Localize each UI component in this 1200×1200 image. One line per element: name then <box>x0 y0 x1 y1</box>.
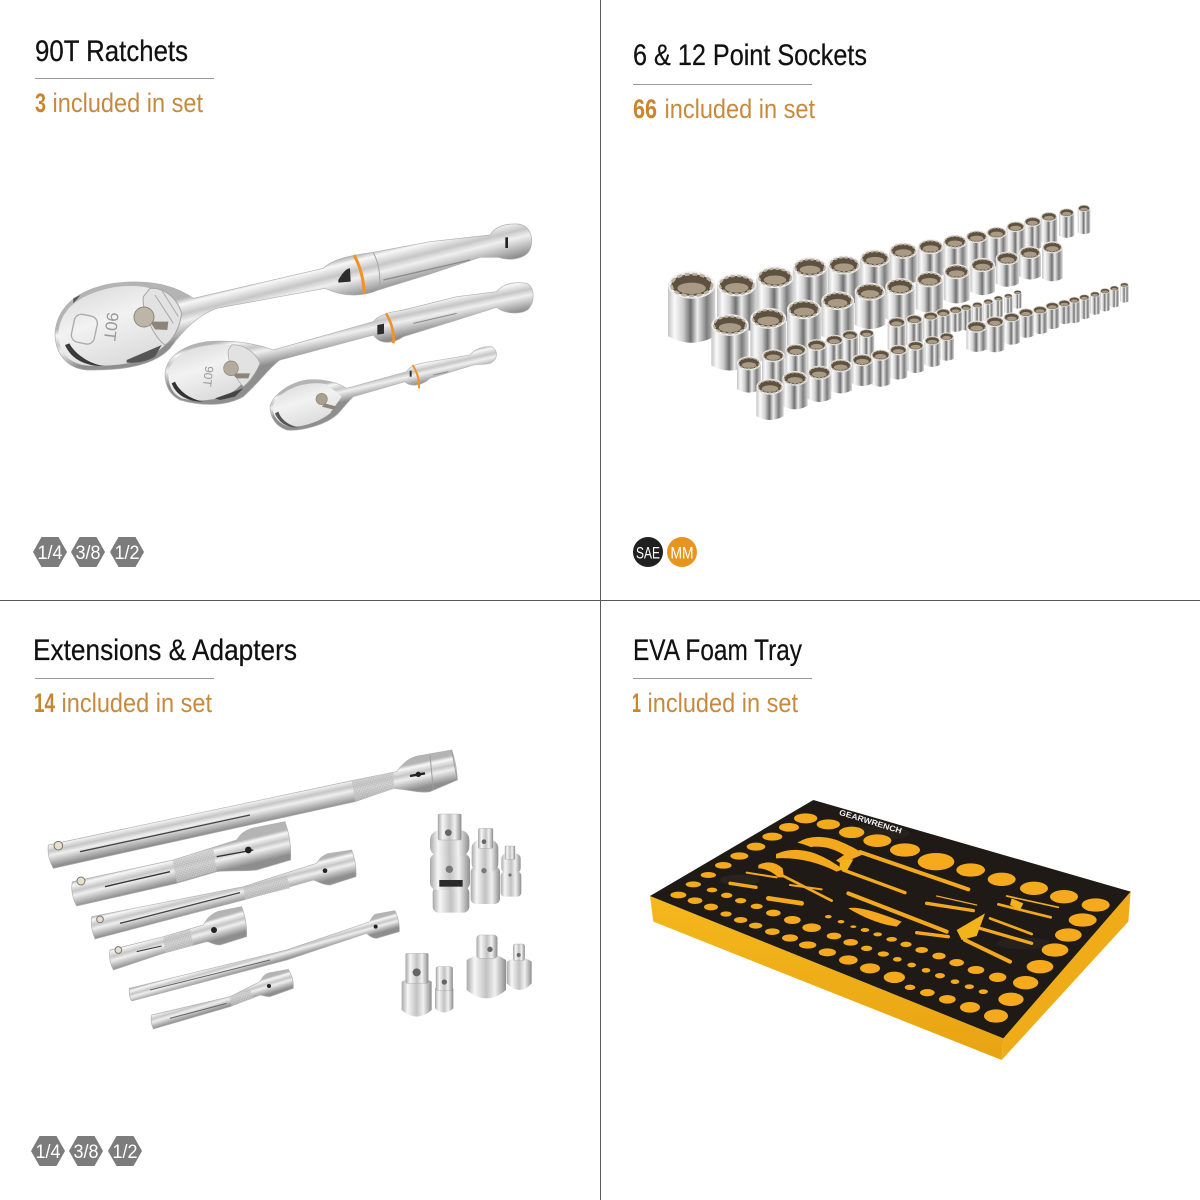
count: 3 included in set: included in set <box>52 88 203 118</box>
socket holes <box>670 813 1110 1023</box>
image: foam tray <box>650 800 1131 1060</box>
ratchet: large <box>55 224 532 370</box>
ratchet: large: 90T <box>100 311 122 342</box>
heading: 90T Ratchets: 90T Ratchets <box>35 35 188 68</box>
badge: 3/8: 3/8 <box>76 543 100 564</box>
ratchet: small <box>270 347 496 430</box>
count: 14 included in set: 14 <box>34 688 55 718</box>
count: 1 included in set: 1 <box>632 688 641 718</box>
drive size badges <box>33 537 144 567</box>
badge: 3/8: 3/8 <box>74 1142 98 1163</box>
panel: 90T ratchets <box>33 35 533 567</box>
image: three chrome ratchets <box>55 224 533 430</box>
image: chrome sockets <box>668 205 1129 420</box>
heading: EVA Foam Tray: EVA Foam Tray <box>633 634 802 667</box>
socket adapters <box>402 935 532 1017</box>
badge: 1/2: 1/2 <box>112 1142 138 1163</box>
count: 1 included in set: included in set <box>648 688 798 718</box>
ratchet: medium <box>165 283 533 404</box>
badge: SAE: SAE <box>636 544 660 562</box>
count: 14 included in set: included in set <box>62 688 212 718</box>
badge: MM: MM <box>670 544 694 562</box>
drive size badges <box>31 1136 142 1166</box>
image: extensions and adapters <box>48 750 532 1029</box>
measurement badges <box>633 537 697 567</box>
tray body <box>650 800 1131 1060</box>
badge: 1/4: 1/4 <box>36 1142 61 1163</box>
tool cutouts <box>730 837 1058 962</box>
universal joints <box>430 814 521 913</box>
badge: 1/2: 1/2 <box>114 543 140 564</box>
count: 66 included in set: included in set <box>664 94 815 124</box>
panel: EVA foam tray <box>632 634 1131 1060</box>
logo: GEARWRENCH: GEARWRENCH <box>838 808 903 836</box>
panel: extensions and adapters <box>31 634 532 1166</box>
ratchet: medium: 90T <box>200 365 216 388</box>
panel: 6 & 12 point sockets <box>633 39 1129 567</box>
badge: 1/4: 1/4 <box>38 543 63 564</box>
heading: Extensions & Adapters: Extensions & Adapters <box>33 634 297 667</box>
count: 3 included in set: 3 <box>35 88 46 118</box>
heading: 6 & 12 Point Sockets: 6 & 12 Point Sockets <box>633 39 867 72</box>
count: 66 included in set: 66 <box>633 94 657 124</box>
extension bars <box>48 750 457 1029</box>
